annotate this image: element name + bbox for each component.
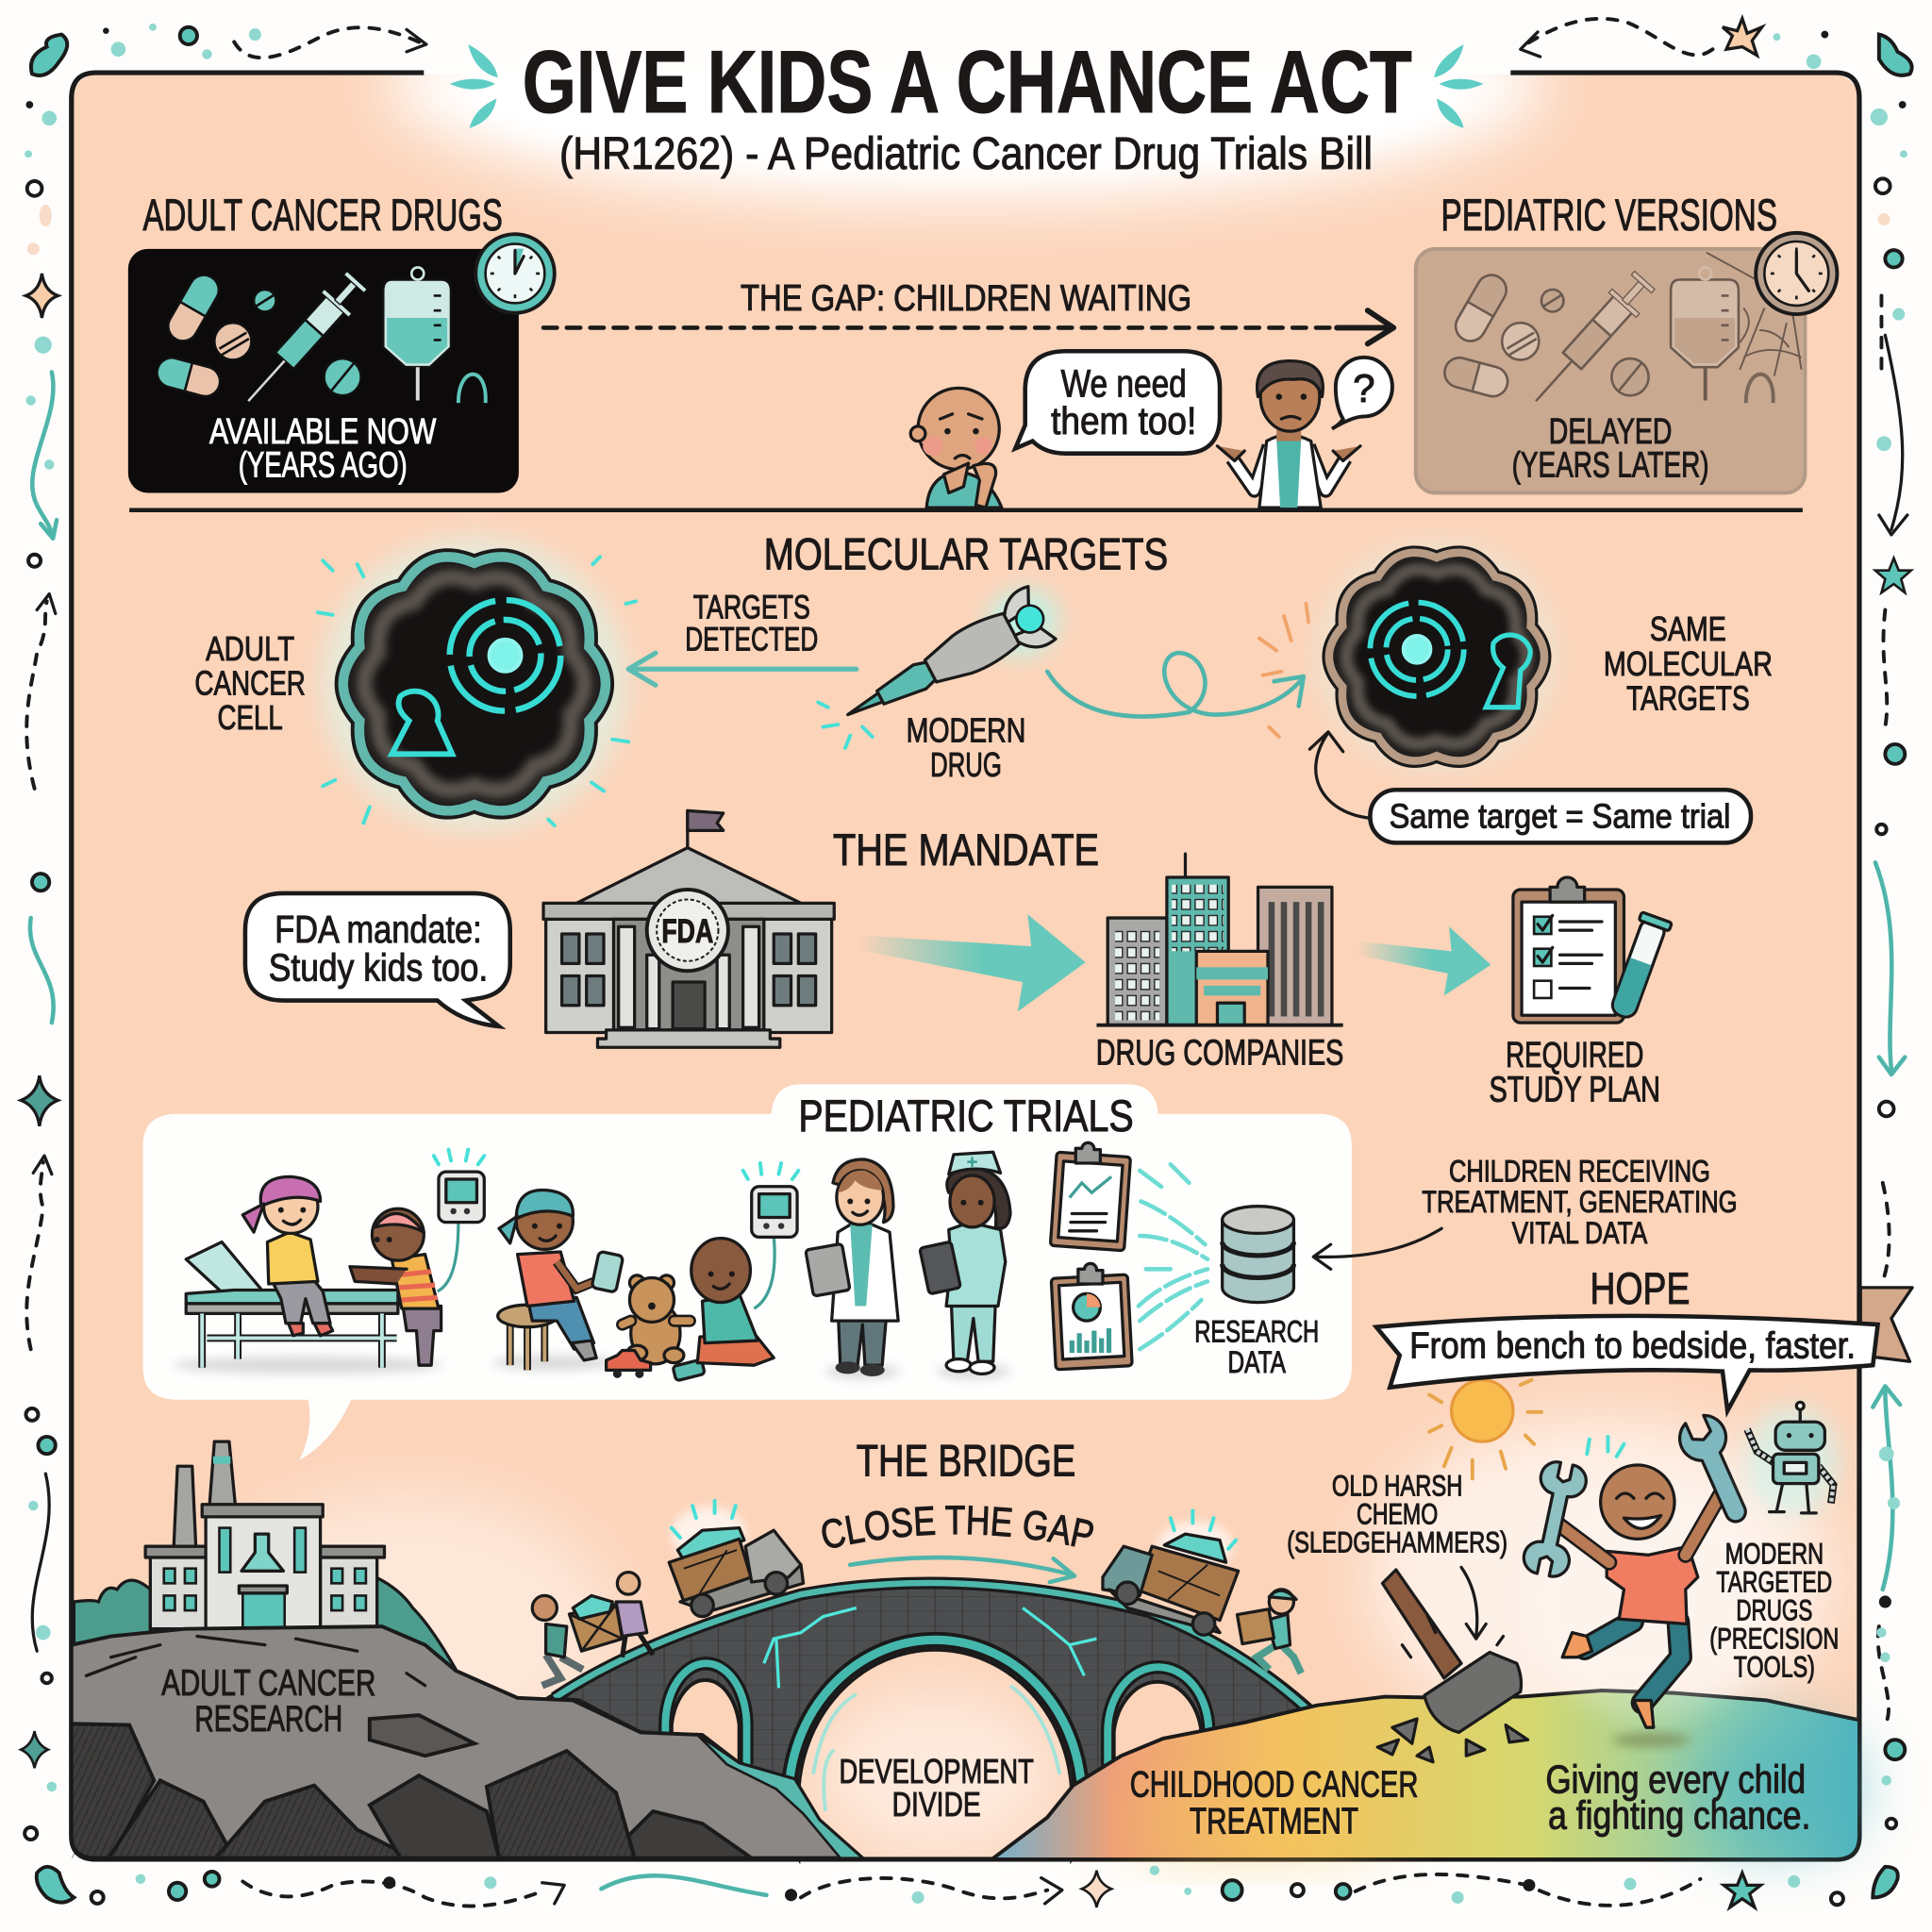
speech bubble: we need them too bbox=[1015, 351, 1220, 454]
label: required study plan: STUDY PLAN bbox=[1489, 1071, 1660, 1110]
toy bottle bbox=[673, 1359, 705, 1381]
icon: drug companies bbox=[1096, 854, 1343, 1025]
icon: wrench right bbox=[1674, 1410, 1761, 1530]
clipboard pie and bars bbox=[1051, 1263, 1132, 1370]
speech bubble: FDA mandate: FDA mandate: bbox=[275, 908, 482, 951]
curved arrow to cell bbox=[1309, 732, 1370, 818]
nurse with tablet bbox=[920, 1152, 1010, 1374]
icon: target bbox=[450, 600, 560, 711]
label: fighting chance bbox=[1546, 1757, 1810, 1837]
truck bbox=[669, 1501, 804, 1617]
icon: sledgehammer bbox=[1377, 1570, 1528, 1762]
label: adult cancer research: ADULT CANCER bbox=[161, 1663, 375, 1704]
label: the gap: THE GAP: CHILDREN WAITING bbox=[741, 278, 1191, 319]
heading: the mandate: THE MANDATE bbox=[833, 824, 1099, 874]
modern drug label: DRUG bbox=[930, 745, 1002, 784]
targets detected label bbox=[685, 590, 818, 658]
heading: pediatric versions: PEDIATRIC VERSIONS bbox=[1441, 190, 1777, 240]
icon: modern drug stylus bbox=[833, 577, 1070, 743]
right hill: childhood cancer treatment bbox=[991, 1690, 1860, 1859]
bushes bbox=[74, 1577, 456, 1670]
label: available now bbox=[209, 412, 437, 485]
callout: same target same trial: Same target = Same trial bbox=[1390, 797, 1730, 836]
label: delayed: DELAYED bbox=[1549, 412, 1672, 452]
label: development divide: DIVIDE bbox=[892, 1785, 981, 1824]
speech bubble: we need them too: them too! bbox=[1051, 399, 1196, 442]
icon: research database bbox=[1223, 1207, 1293, 1303]
label: required study plan: REQUIRED bbox=[1506, 1036, 1643, 1075]
arrow: companies to plan bbox=[1357, 926, 1491, 995]
bridge bbox=[548, 1580, 1316, 1858]
label: modern targeted drugs: MODERN bbox=[1725, 1537, 1824, 1570]
adult cancer cell label: ADULT bbox=[206, 629, 294, 668]
label: childhood cancer treatment bbox=[1130, 1764, 1418, 1842]
label: drug companies: DRUG COMPANIES bbox=[1096, 1033, 1343, 1073]
label: fighting chance: a fighting chance. bbox=[1548, 1792, 1810, 1837]
child on stool bbox=[498, 1191, 624, 1370]
arrow: under close the gap bbox=[850, 1557, 1074, 1582]
sparks at tip bbox=[818, 702, 873, 748]
arrow to database bbox=[1313, 1228, 1441, 1269]
banner: from bench to bedside: From bench to bedside, faster. bbox=[1409, 1325, 1856, 1366]
label: modern targeted drugs bbox=[1709, 1537, 1839, 1684]
speech bubble: FDA mandate: Study kids too. bbox=[269, 946, 488, 990]
icon: old clock bbox=[1756, 233, 1837, 314]
adult cancer cell label: CANCER bbox=[194, 664, 306, 703]
title splashes bbox=[450, 44, 1484, 128]
curved heading: close the gap: CLOSE THE GAP bbox=[822, 1506, 1094, 1548]
toy car bbox=[607, 1351, 651, 1378]
worker with crate bbox=[1237, 1590, 1301, 1674]
icon: research factory bbox=[145, 1441, 385, 1629]
label: fighting chance: Giving every child bbox=[1546, 1757, 1806, 1801]
heading: the bridge: THE BRIDGE bbox=[857, 1436, 1075, 1486]
label: children receiving treatment: VITAL DATA bbox=[1512, 1215, 1647, 1250]
arrow: mandate to companies bbox=[858, 914, 1086, 1011]
icon: faded medicines bbox=[1441, 267, 1774, 413]
label: modern targeted drugs: DRUGS bbox=[1736, 1594, 1812, 1627]
title: GIVE KIDS A CHANCE ACT bbox=[523, 32, 1412, 131]
banner: from bench to bedside bbox=[1376, 1288, 1912, 1411]
worker pushing crate bbox=[532, 1573, 653, 1686]
panel: adult drugs black card bbox=[128, 249, 519, 492]
adult cancer cell label bbox=[194, 629, 306, 737]
doctor shrugging bbox=[1217, 361, 1360, 508]
divider bbox=[129, 508, 1803, 511]
teal waves bbox=[32, 372, 53, 534]
icon: keyhole bbox=[1486, 635, 1530, 708]
same molecular targets label: TARGETS bbox=[1626, 678, 1750, 717]
monitor left bbox=[434, 1150, 484, 1291]
rocks bbox=[72, 1715, 752, 1858]
heading: molecular targets: MOLECULAR TARGETS bbox=[764, 528, 1168, 578]
icon: target bbox=[1370, 603, 1464, 696]
label: old harsh chemo: CHEMO bbox=[1357, 1498, 1438, 1531]
doctor with clipboard bbox=[806, 1159, 898, 1376]
arrow to sledgehammer bbox=[1461, 1567, 1486, 1639]
loop arrow bbox=[1047, 653, 1304, 717]
label: available now: AVAILABLE NOW bbox=[209, 412, 437, 452]
label: research data: DATA bbox=[1228, 1344, 1286, 1379]
panel: pediatric trials bbox=[143, 1084, 1352, 1460]
label: required study plan bbox=[1489, 1036, 1660, 1110]
icon: cobweb bbox=[1707, 253, 1802, 375]
label: adult cancer research bbox=[161, 1663, 375, 1740]
label: research data bbox=[1194, 1313, 1319, 1379]
child with monitor bbox=[691, 1239, 774, 1365]
icon: hospital bed bbox=[186, 1242, 398, 1368]
icon: medicines bbox=[154, 267, 486, 413]
label: children receiving treatment: TREATMENT, GENERATING bbox=[1422, 1184, 1738, 1219]
child on bed bbox=[242, 1176, 333, 1336]
cracks glowing bbox=[764, 1607, 1096, 1688]
adult cancer cell bbox=[318, 536, 636, 832]
rays bbox=[318, 557, 636, 825]
icon: FDA building: FDA bbox=[661, 913, 713, 950]
rock hatching bbox=[72, 1724, 635, 1858]
rings bbox=[180, 27, 197, 44]
happy child with tools bbox=[1521, 1410, 1774, 1727]
label: old harsh chemo: (SLEDGEHAMMERS) bbox=[1287, 1526, 1507, 1559]
dashed arrows bbox=[234, 27, 422, 58]
orange sparks bbox=[1259, 604, 1308, 737]
teddy bear bbox=[623, 1275, 690, 1364]
label: research data: RESEARCH bbox=[1194, 1313, 1319, 1348]
icon: keyhole bbox=[391, 691, 452, 754]
arrow: the gap bbox=[543, 278, 1393, 343]
question bubble bbox=[1332, 358, 1392, 429]
heading: adult cancer drugs: ADULT CANCER DRUGS bbox=[143, 190, 503, 240]
same molecular targets label: MOLECULAR bbox=[1604, 644, 1773, 683]
stars bbox=[25, 274, 58, 318]
same molecular target cell bbox=[1316, 540, 1557, 772]
heading: pediatric trials: PEDIATRIC TRIALS bbox=[798, 1091, 1134, 1141]
heading: hope: HOPE bbox=[1591, 1263, 1690, 1313]
same molecular targets label: SAME bbox=[1650, 609, 1726, 648]
targets detected label: TARGETS bbox=[693, 590, 810, 626]
adult cancer cell label: CELL bbox=[218, 698, 283, 737]
clipboard line chart bbox=[1050, 1142, 1130, 1251]
label: children receiving treatment bbox=[1422, 1154, 1738, 1250]
teal dots bbox=[111, 42, 125, 57]
icon: wrench left bbox=[1521, 1459, 1589, 1579]
label: development divide bbox=[839, 1752, 1034, 1824]
question bubble: ? bbox=[1353, 366, 1375, 410]
label: childhood cancer treatment: CHILDHOOD CANCER bbox=[1130, 1764, 1418, 1805]
icon: teal clock bbox=[475, 234, 555, 313]
label: childhood cancer treatment: TREATMENT bbox=[1190, 1802, 1358, 1842]
same molecular targets label bbox=[1604, 609, 1773, 717]
divide glow bbox=[813, 1686, 1059, 1811]
label: delayed: (YEARS LATER) bbox=[1512, 445, 1709, 485]
speech bubble: FDA mandate bbox=[245, 893, 510, 1026]
icon: FDA building bbox=[543, 810, 834, 1047]
arrow to adult cell bbox=[628, 653, 857, 685]
icon: robot bbox=[1746, 1402, 1840, 1514]
bottom left hill: adult cancer research bbox=[72, 1441, 862, 1858]
label: old harsh chemo: OLD HARSH bbox=[1332, 1470, 1462, 1503]
data streams bbox=[1139, 1164, 1208, 1349]
callout: same target same trial bbox=[1370, 790, 1751, 842]
modern drug label bbox=[907, 710, 1025, 784]
label: development divide: DEVELOPMENT bbox=[839, 1752, 1034, 1790]
speech bubble: we need them too: We need bbox=[1061, 362, 1187, 406]
label: modern targeted drugs: TOOLS) bbox=[1734, 1651, 1815, 1684]
targets detected label: DETECTED bbox=[685, 622, 818, 658]
subtitle: (HR1262) - A Pediatric Cancer Drug Trials Bill bbox=[559, 128, 1373, 179]
label: modern targeted drugs: TARGETED bbox=[1716, 1566, 1832, 1599]
floor shadows bbox=[173, 1356, 1010, 1379]
monitor right bbox=[743, 1163, 798, 1308]
modern drug label: MODERN bbox=[907, 710, 1025, 749]
child worried bbox=[910, 388, 1002, 508]
peach dots bbox=[27, 205, 1890, 255]
truck and worker right bbox=[1103, 1510, 1301, 1674]
truck and workers left bbox=[532, 1501, 804, 1686]
label: available now: (YEARS AGO) bbox=[239, 445, 408, 485]
panel: pediatric drugs delayed card bbox=[1416, 249, 1805, 492]
label: adult cancer research: RESEARCH bbox=[194, 1699, 342, 1740]
label: children receiving treatment: CHILDREN RECEIVING bbox=[1449, 1154, 1710, 1189]
label: delayed bbox=[1512, 412, 1709, 485]
child with stripes bbox=[350, 1208, 441, 1365]
label: modern targeted drugs: (PRECISION bbox=[1709, 1623, 1839, 1656]
icon: required study plan clipboard bbox=[1513, 877, 1672, 1023]
label: old harsh chemo bbox=[1287, 1470, 1507, 1559]
black curves bbox=[1885, 335, 1903, 530]
icon: sun bbox=[1429, 1380, 1541, 1478]
